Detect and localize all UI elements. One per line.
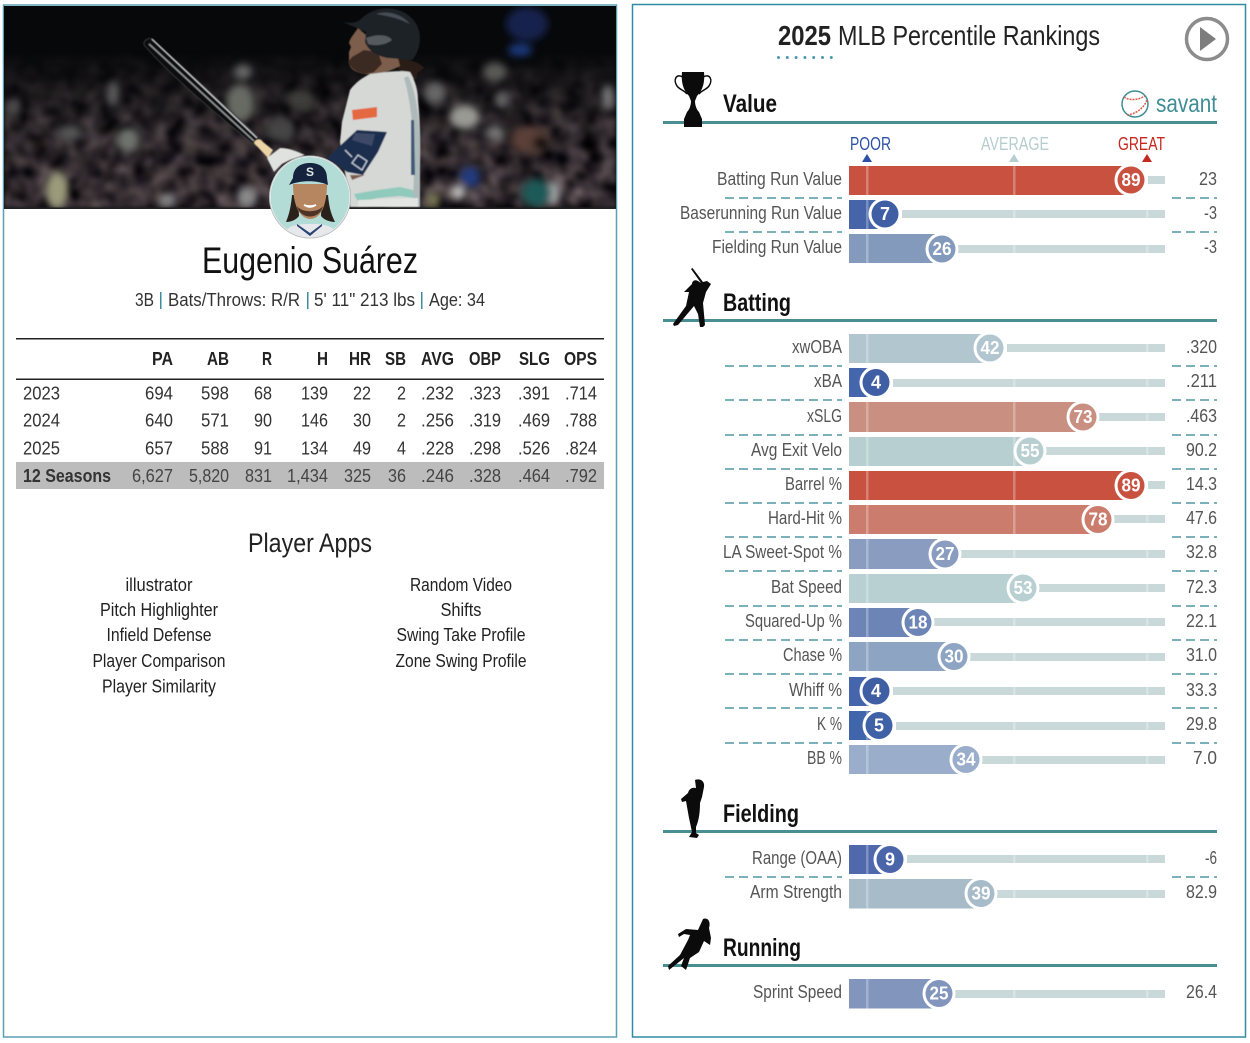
- row 2024: .469: [518, 410, 550, 430]
- batter hair: [398, 58, 424, 79]
- batter jersey: [340, 71, 420, 207]
- row 2025: .298: [469, 438, 501, 458]
- row 2025: 134: [301, 438, 328, 458]
- row career totals: .328: [469, 466, 501, 486]
- row: Fielding Run Value 26: 26: [932, 239, 952, 259]
- row: Hard-Hit % 78: [768, 503, 1217, 536]
- player apps list: right column: Shifts: [440, 600, 482, 620]
- row: Batting Run Value 89: 23: [1199, 169, 1217, 189]
- row: Avg Exit Velo 55: Avg Exit Velo: [751, 440, 842, 460]
- row career totals: .464: [518, 466, 550, 486]
- row career totals: 6,627: [132, 466, 173, 486]
- row: Bat Speed 53: 53: [1014, 578, 1032, 598]
- row 2024: .788: [565, 410, 597, 430]
- row 2024: 2024: [23, 410, 60, 430]
- row: BB % 34: 34: [956, 750, 976, 770]
- player headshot: S: [306, 165, 314, 179]
- row: Fielding Run Value 26: Fielding Run Value: [712, 237, 842, 257]
- icon: batter silhouette: [673, 268, 711, 327]
- heading: running: Running: [723, 934, 801, 962]
- row: LA Sweet-Spot % 27: [723, 538, 1217, 570]
- row: xSLG 73: [807, 400, 1217, 434]
- row: Fielding Run Value 26: [712, 232, 1217, 266]
- player apps list: left column: [92, 575, 226, 696]
- player apps list: left column: Pitch Highlighter: [100, 600, 218, 620]
- row: Barrel % 89: 14.3: [1186, 474, 1217, 494]
- row: K % 5: [817, 709, 1217, 742]
- player headshot: [270, 156, 350, 240]
- row: Whiff % 4: 33.3: [1186, 680, 1217, 700]
- row: Barrel % 89: 89: [1122, 476, 1140, 496]
- row: Fielding Run Value 26: -3: [1204, 237, 1217, 257]
- row 2024: 146: [301, 410, 328, 430]
- row: Chase % 30: Chase %: [783, 645, 842, 665]
- row: Squared-Up % 18: [745, 606, 1217, 639]
- row 2023: 139: [301, 384, 328, 404]
- percentile scale legend: AVERAGE: [981, 134, 1049, 154]
- row 2024: 90: [254, 410, 272, 430]
- row: Arm Strength 39: [750, 877, 1217, 910]
- row: K % 5: 5: [874, 716, 884, 736]
- panel title: [778, 20, 1100, 51]
- row 2023: .391: [518, 384, 550, 404]
- row: Bat Speed 53: 72.3: [1186, 577, 1217, 597]
- row: BB % 34: [807, 743, 1217, 776]
- player apps list: left column: illustrator: [126, 575, 192, 595]
- row: Sprint Speed 25: 26.4: [1186, 982, 1217, 1002]
- row: Batting Run Value 89: 89: [1122, 170, 1140, 190]
- table header: HR: [349, 349, 371, 369]
- row: Range (OAA) 9: 9: [885, 850, 895, 870]
- row: Bat Speed 53: Bat Speed: [771, 577, 842, 597]
- savant logo: [1122, 90, 1217, 118]
- row 2024: .319: [469, 410, 501, 430]
- row 2025: 4: [397, 438, 406, 458]
- row: Hard-Hit % 78: Hard-Hit %: [768, 508, 842, 528]
- row career totals: 1,434: [287, 466, 328, 486]
- row: Batting Run Value 89: Batting Run Value: [717, 169, 842, 189]
- player bio line: Bats/Throws: R/R: [168, 289, 300, 310]
- row career totals: .792: [565, 466, 597, 486]
- row: Sprint Speed 25: Sprint Speed: [753, 982, 842, 1002]
- row 2024: 30: [353, 410, 371, 430]
- row: Whiff % 4: Whiff %: [789, 680, 842, 700]
- row: xwOBA 42: xwOBA: [792, 337, 842, 357]
- row: Hard-Hit % 78: 78: [1088, 510, 1108, 530]
- row career totals: [16, 462, 604, 489]
- stats table: [16, 338, 604, 489]
- player apps list: right column: [396, 575, 526, 671]
- icon: fielder silhouette: [681, 779, 704, 838]
- row: LA Sweet-Spot % 27: 32.8: [1186, 542, 1217, 562]
- row: Batting Run Value 89: [717, 164, 1217, 196]
- row: Avg Exit Velo 55: 90.2: [1186, 440, 1217, 460]
- row: Range (OAA) 9: -6: [1205, 848, 1217, 868]
- percentile scale legend: POOR: [850, 134, 891, 154]
- row: Baserunning Run Value 7: Baserunning Run Value: [680, 203, 842, 223]
- row 2023: 68: [254, 384, 272, 404]
- bat: [144, 8, 424, 207]
- icon: trophy: [675, 72, 711, 127]
- row 2025: .824: [565, 438, 597, 458]
- batter face: [349, 28, 400, 74]
- row 2024: 571: [201, 410, 229, 430]
- icon: play button: [1186, 18, 1228, 60]
- hero photo: batter and crowd: [4, 6, 616, 208]
- row: Hard-Hit % 78: 47.6: [1186, 508, 1217, 528]
- row: Chase % 30: 31.0: [1186, 645, 1217, 665]
- row: xBA 4: 4: [871, 372, 881, 392]
- row: Range (OAA) 9: [752, 843, 1217, 876]
- row career totals: 831: [245, 466, 272, 486]
- row: xwOBA 42: 42: [980, 338, 1000, 358]
- row 2025: 91: [254, 438, 272, 458]
- row 2023: .714: [565, 384, 597, 404]
- row 2025: 2025: [23, 438, 60, 458]
- player bio line: [135, 289, 485, 310]
- row: LA Sweet-Spot % 27: LA Sweet-Spot %: [723, 542, 842, 562]
- batter glove: [267, 148, 305, 172]
- row 2024: 640: [145, 410, 173, 430]
- player apps list: left column: Infield Defense: [106, 625, 212, 645]
- row: Barrel % 89: Barrel %: [785, 474, 842, 494]
- player bio line: Age: 34: [429, 289, 485, 310]
- table header: SB: [385, 349, 406, 369]
- row 2024: 2: [397, 410, 406, 430]
- heading: fielding: Fielding: [723, 800, 799, 828]
- row: Bat Speed 53: [771, 572, 1217, 604]
- panel title: 2025: [778, 20, 831, 51]
- row 2023: 22: [353, 384, 371, 404]
- player bio line: 3B: [135, 289, 154, 310]
- row: Avg Exit Velo 55: [751, 434, 1217, 468]
- row: Arm Strength 39: Arm Strength: [750, 882, 842, 902]
- row 2025: .526: [518, 438, 550, 458]
- player apps list: right column: Random Video: [410, 575, 512, 595]
- table header: H: [317, 349, 328, 369]
- row 2023: [23, 384, 597, 404]
- batter sleeve: [327, 130, 387, 175]
- row: xSLG 73: xSLG: [807, 406, 842, 426]
- row 2025: .228: [421, 438, 454, 458]
- row: xBA 4: [814, 366, 1217, 399]
- row: K % 5: 29.8: [1186, 714, 1217, 734]
- row: xBA 4: .211: [1186, 371, 1217, 391]
- row: Baserunning Run Value 7: [680, 198, 1217, 230]
- row 2023: .232: [421, 384, 454, 404]
- player apps list: left column: Player Comparison: [92, 651, 226, 671]
- player name: Eugenio Suárez: [202, 240, 418, 281]
- table header: [152, 349, 597, 369]
- player apps list: left column: Player Similarity: [102, 676, 216, 696]
- row: BB % 34: 7.0: [1193, 748, 1217, 768]
- row: Whiff % 4: 4: [871, 681, 881, 701]
- percentile scale legend: [850, 134, 1165, 162]
- row: Barrel % 89: [785, 469, 1217, 502]
- row: K % 5: K %: [817, 714, 842, 734]
- player apps list: right column: Swing Take Profile: [396, 625, 526, 645]
- heading: batting: Batting: [723, 289, 791, 317]
- icon: runner silhouette: [668, 919, 711, 970]
- table header: R: [262, 349, 272, 369]
- row: xwOBA 42: .320: [1186, 337, 1217, 357]
- row: Baserunning Run Value 7: 7: [880, 204, 890, 224]
- row career totals: 36: [388, 466, 406, 486]
- panel: player profile: [4, 5, 616, 1037]
- table header: OPS: [564, 349, 597, 369]
- row: Range (OAA) 9: Range (OAA): [752, 848, 842, 868]
- table header: OBP: [469, 349, 501, 369]
- player apps heading: Player Apps: [248, 528, 372, 558]
- row 2025: 588: [201, 438, 229, 458]
- row: xBA 4: xBA: [814, 371, 842, 391]
- row 2023: 2023: [23, 384, 60, 404]
- row: Squared-Up % 18: 18: [908, 612, 928, 632]
- row career totals: 5,820: [189, 466, 229, 486]
- row: Whiff % 4: [789, 674, 1217, 708]
- title dots: [778, 56, 832, 59]
- row: Baserunning Run Value 7: -3: [1204, 203, 1217, 223]
- row 2024: [23, 410, 597, 430]
- player bio line: 5' 11" 213 lbs: [314, 289, 415, 310]
- row career totals: 325: [344, 466, 371, 486]
- table header: AVG: [421, 349, 454, 369]
- batter helmet: [345, 8, 420, 60]
- row: Squared-Up % 18: Squared-Up %: [745, 611, 842, 631]
- row: Arm Strength 39: 39: [972, 884, 990, 904]
- row: Sprint Speed 25: [753, 977, 1217, 1010]
- row: Sprint Speed 25: 25: [930, 984, 948, 1004]
- row: Squared-Up % 18: 22.1: [1186, 611, 1217, 631]
- row: xSLG 73: .463: [1186, 406, 1217, 426]
- row 2025: [23, 438, 597, 458]
- row: LA Sweet-Spot % 27: 27: [936, 544, 954, 564]
- table header: PA: [152, 349, 173, 369]
- row: Chase % 30: 30: [944, 646, 964, 666]
- row: xwOBA 42: [792, 332, 1217, 364]
- row 2023: 694: [145, 384, 173, 404]
- savant logo: savant: [1156, 90, 1217, 118]
- row: xSLG 73: 73: [1074, 407, 1092, 427]
- row 2025: 657: [145, 438, 173, 458]
- panel title: MLB Percentile Rankings: [838, 20, 1100, 51]
- table header: SLG: [519, 349, 550, 369]
- row 2025: 49: [353, 438, 371, 458]
- row 2024: .256: [421, 410, 454, 430]
- table header: AB: [207, 349, 229, 369]
- row: Avg Exit Velo 55: 55: [1020, 441, 1040, 461]
- heading: value: Value: [723, 90, 777, 118]
- panel: percentile rankings: [632, 4, 1246, 1037]
- hero bottom edge: [4, 208, 616, 209]
- row: BB % 34: BB %: [807, 748, 842, 768]
- row: Arm Strength 39: 82.9: [1186, 882, 1217, 902]
- player apps list: right column: Zone Swing Profile: [396, 651, 526, 671]
- row career totals: 12 Seasons: [23, 466, 111, 486]
- row 2023: 598: [201, 384, 229, 404]
- row 2023: 2: [397, 384, 406, 404]
- row career totals: .246: [421, 466, 454, 486]
- row 2023: .323: [469, 384, 501, 404]
- row: Chase % 30: [783, 640, 1217, 673]
- percentile scale legend: GREAT: [1118, 134, 1165, 154]
